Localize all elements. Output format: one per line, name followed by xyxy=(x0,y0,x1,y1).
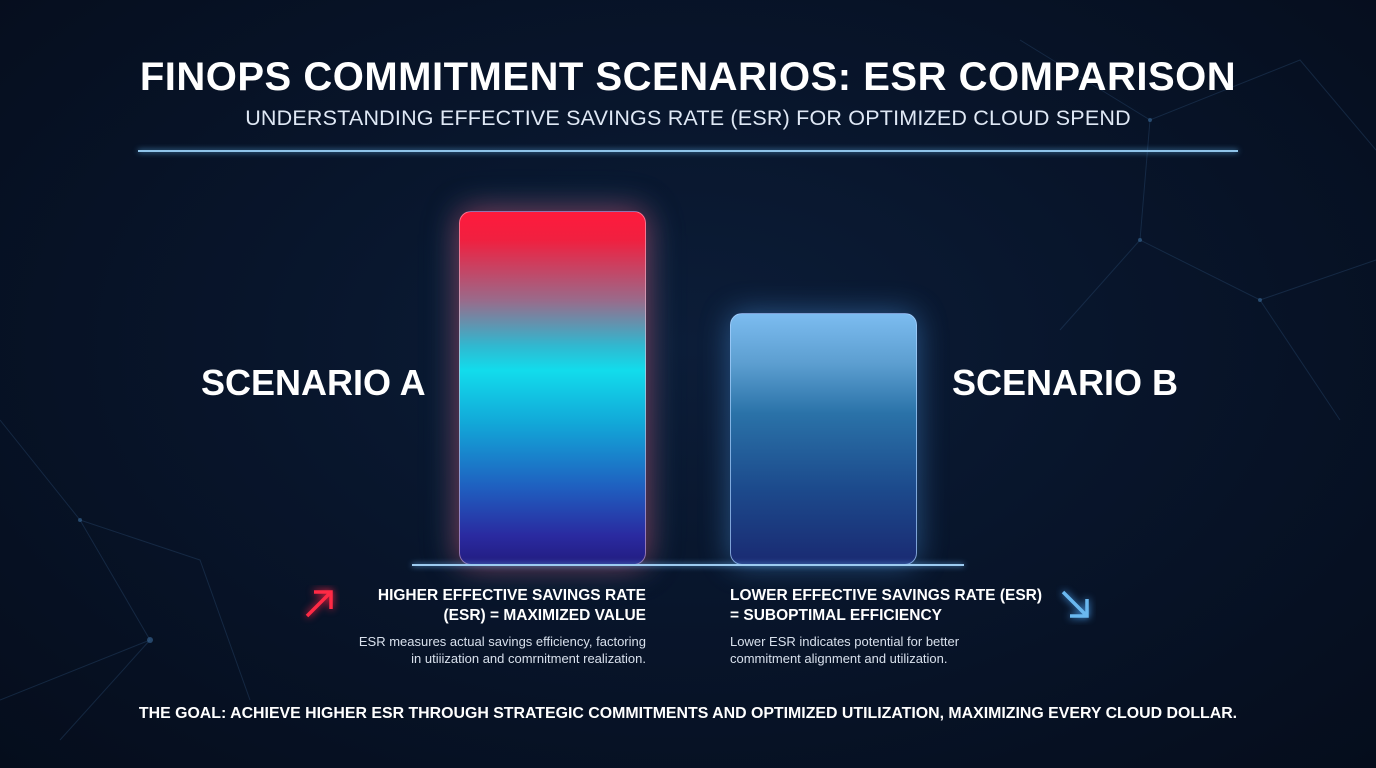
text block: higher ESR: ESR measures actual savings efficiency, factoring xyxy=(359,634,646,649)
bar: scenario A xyxy=(459,211,646,565)
icon: up arrow xyxy=(302,585,340,622)
label: scenario A: SCENARIO A xyxy=(201,362,426,403)
text block: higher ESR: (ESR) = MAXIMIZED VALUE xyxy=(443,607,646,624)
icon: down arrow xyxy=(1058,587,1095,624)
text block: higher ESR: in utiiization and comrnitment realization. xyxy=(411,651,646,666)
footer goal statement: THE GOAL: ACHIEVE HIGHER ESR THROUGH STRATEGIC COMMITMENTS AND OPTIMIZED UTILIZATION, MAXIMIZING EVERY CLOUD DOLLAR. xyxy=(139,705,1237,722)
bar: scenario B xyxy=(730,313,917,565)
text block: lower ESR: commitment alignment and utilization. xyxy=(730,651,948,666)
text block: lower ESR xyxy=(730,587,1042,666)
text block: lower ESR: Lower ESR indicates potential for better xyxy=(730,634,959,649)
text block: higher ESR xyxy=(359,587,646,666)
text block: lower ESR: = SUBOPTIMAL EFFICIENCY xyxy=(730,607,942,624)
text block: lower ESR: LOWER EFFECTIVE SAVINGS RATE (ESR) xyxy=(730,587,1042,604)
title: FINOPS COMMITMENT SCENARIOS: ESR COMPARISON xyxy=(140,55,1236,99)
text block: higher ESR: HIGHER EFFECTIVE SAVINGS RATE xyxy=(378,587,646,604)
subtitle: UNDERSTANDING EFFECTIVE SAVINGS RATE (ESR) FOR OPTIMIZED CLOUD SPEND xyxy=(245,106,1131,130)
baseline xyxy=(412,564,964,566)
label: scenario B: SCENARIO B xyxy=(952,362,1178,403)
